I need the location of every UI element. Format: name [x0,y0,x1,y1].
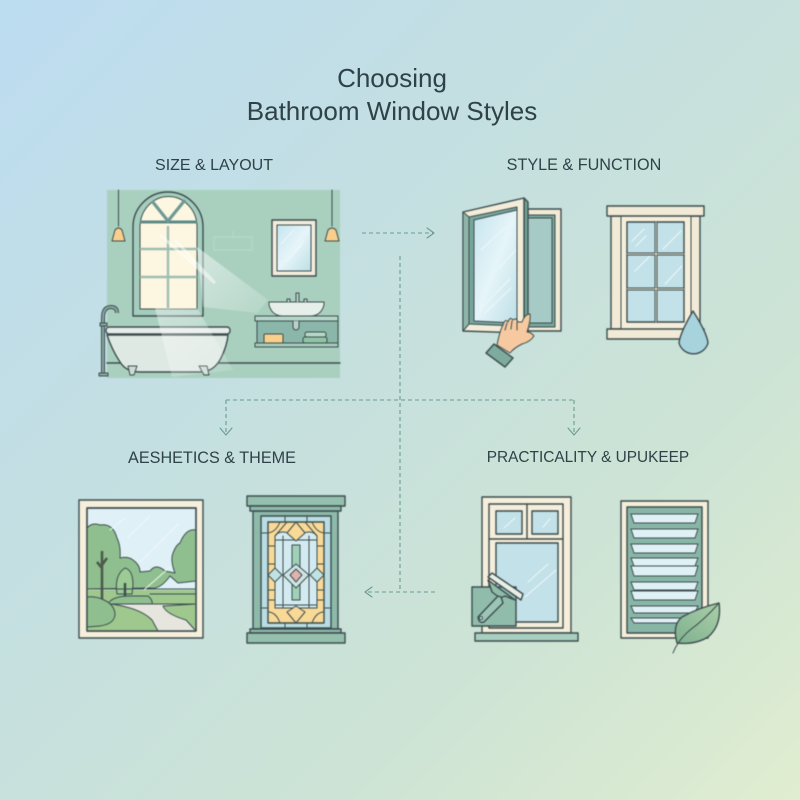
panel: picture window landscape [79,500,203,638]
heading: style and function: STYLE & FUNCTION [507,156,661,174]
title [247,63,537,126]
icon: right pendant lamp [325,190,339,241]
title: Bathroom Window Styles [247,96,537,126]
light beams [155,235,268,377]
panel: bathroom scene [99,190,340,378]
connector: branching flow lines [220,256,580,592]
icon: squeegee on cloth [472,573,523,626]
icon: left pendant lamp [112,190,125,241]
arrow: practicality to aesthetics [365,587,435,597]
title: Choosing [337,63,447,93]
icon: vanity with sink [255,293,338,347]
panel: fixed window with water drop [607,206,708,354]
icon: water drop [679,311,708,354]
icon: bathtub [99,307,230,376]
panel: louver window with leaf [621,501,720,653]
icon: mirror [272,220,316,276]
window sill [475,633,578,641]
icon: hand [486,314,534,367]
panel: casement window with hand [463,198,561,367]
panel: window with squeegee [472,497,578,641]
arrow: size to style [362,228,434,238]
heading: practicality and upkeep: PRACTICALITY & UPUKEEP [487,449,689,466]
icon: arched window [133,192,203,316]
heading: aesthetics and theme: AESHETICS & THEME [128,449,296,467]
icon: leaf [673,603,720,653]
heading: size and layout: SIZE & LAYOUT [155,157,273,174]
panel: stained glass window [247,496,345,643]
